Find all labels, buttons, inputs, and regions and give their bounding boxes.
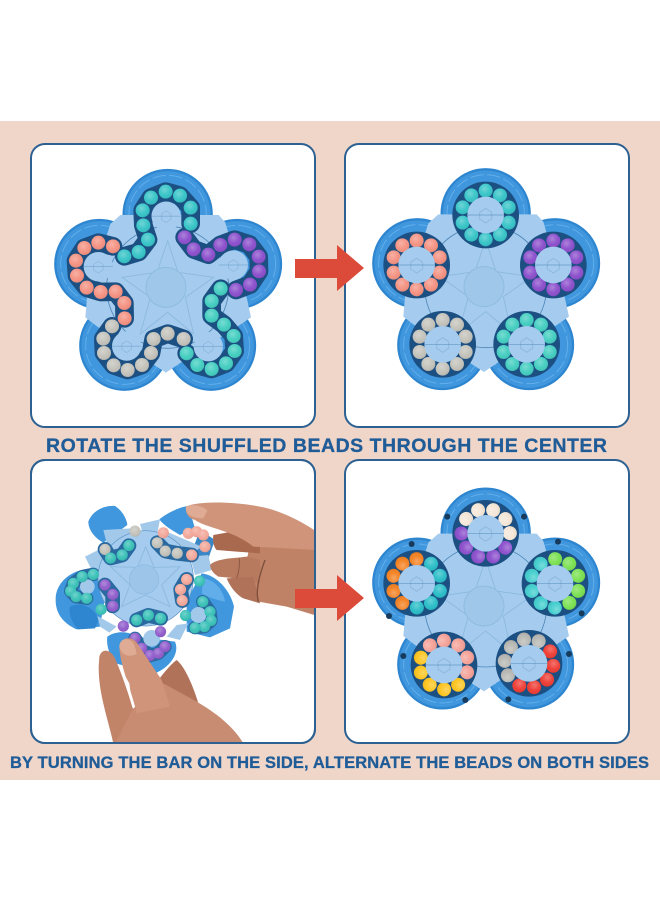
lower hand <box>99 638 243 743</box>
panel: shuffled beads <box>31 144 315 427</box>
right hand <box>186 503 317 616</box>
toy with single-colour rings <box>373 169 599 389</box>
lower right ring: gray and red <box>486 620 572 707</box>
gray beads <box>96 319 191 377</box>
lobe screw holes <box>386 514 585 703</box>
arrow: top row <box>295 245 364 291</box>
toy blue side pieces <box>56 506 234 673</box>
teal beads <box>117 185 198 263</box>
purple beads <box>178 230 266 297</box>
panel: hands turning the side bar <box>31 460 317 743</box>
panel: two-colour finished rings <box>345 460 629 743</box>
toy with two-colour rings <box>373 489 599 708</box>
arrow: bottom row <box>295 575 364 621</box>
pink beads <box>69 236 132 325</box>
peach background band <box>0 121 660 780</box>
toy beads <box>99 526 183 559</box>
toy center body <box>98 531 193 626</box>
left ring: orange and teal <box>378 545 456 622</box>
top ring: pearl and purple <box>447 494 524 572</box>
photo of toy held in hands <box>56 503 317 743</box>
toy light side pieces <box>85 519 212 640</box>
panel outline over photo <box>31 460 315 743</box>
toy bead channels <box>105 543 192 620</box>
toy with beads spread across the center <box>55 170 281 390</box>
heading: turning the bar: BY TURNING THE BAR ON THE SIDE, ALTERNATE THE BEADS ON BOTH SIDES <box>10 754 649 772</box>
side lobe bead channels <box>71 574 211 656</box>
right ring: green and teal <box>516 545 594 622</box>
panel: beads sorted into rings <box>345 144 629 427</box>
lower left ring: pink and yellow <box>401 622 487 708</box>
heading: rotate the beads: ROTATE THE SHUFFLED BEADS THROUGH THE CENTER <box>46 435 607 457</box>
green-teal beads <box>180 282 242 376</box>
